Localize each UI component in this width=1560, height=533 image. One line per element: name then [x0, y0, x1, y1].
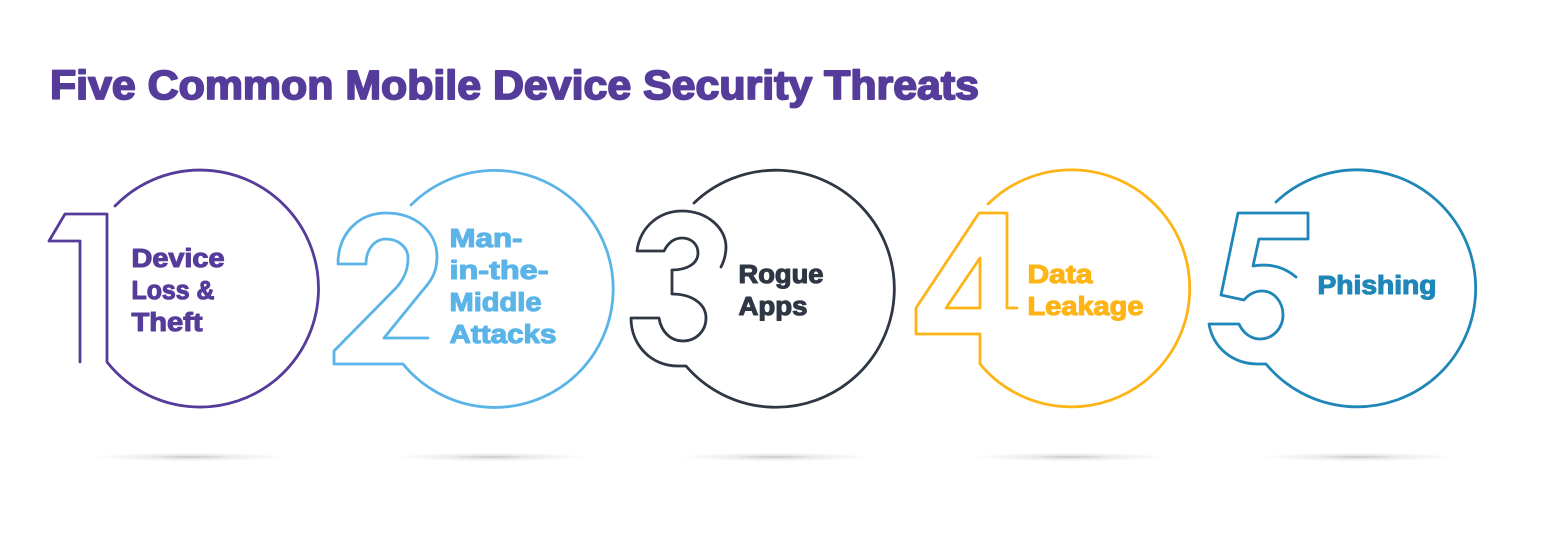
icon: numeral 1 with circle outline [49, 170, 319, 407]
icon: numeral 4 with circle outline [916, 170, 1190, 407]
text: Man-in-the-Middle Attacks: Attacks [450, 321, 556, 349]
text: Rogue Apps: Apps [738, 293, 808, 321]
text: Device Loss & Theft: Theft [132, 309, 203, 337]
text: Device Loss & Theft: Loss & [132, 277, 214, 305]
text: Man-in-the-Middle Attacks [450, 225, 556, 349]
text: Man-in-the-Middle Attacks: in-the- [450, 257, 548, 285]
text: Device Loss & Theft: Device [132, 245, 224, 273]
text: Data Leakage: Data [1028, 261, 1093, 289]
text: Data Leakage [1028, 261, 1144, 321]
text: Data Leakage: Leakage [1028, 293, 1144, 321]
text: Device Loss & Theft [132, 245, 224, 337]
panel: 3 Rogue Apps [631, 170, 894, 407]
shadows [93, 452, 1455, 462]
icon: numeral 3 with circle outline [631, 170, 894, 407]
title: Five Common Mobile Device Security Threats [50, 62, 979, 108]
icon: numeral 5 with circle outline [1209, 170, 1476, 407]
panel: 4 Data Leakage [916, 170, 1190, 407]
panel: 5 Phishing [1209, 170, 1476, 407]
text: Man-in-the-Middle Attacks: Man- [450, 225, 522, 253]
text: Rogue Apps: Rogue [738, 261, 824, 289]
text: Rogue Apps [738, 261, 824, 321]
text: Man-in-the-Middle Attacks: Middle [450, 289, 542, 317]
panel: 2 Man-in-the-Middle Attacks [334, 170, 613, 407]
panel: 1 Device Loss & Theft [49, 170, 319, 407]
text: Phishing: Phishing [1318, 272, 1436, 300]
icon: numeral 2 with circle outline [334, 170, 613, 407]
